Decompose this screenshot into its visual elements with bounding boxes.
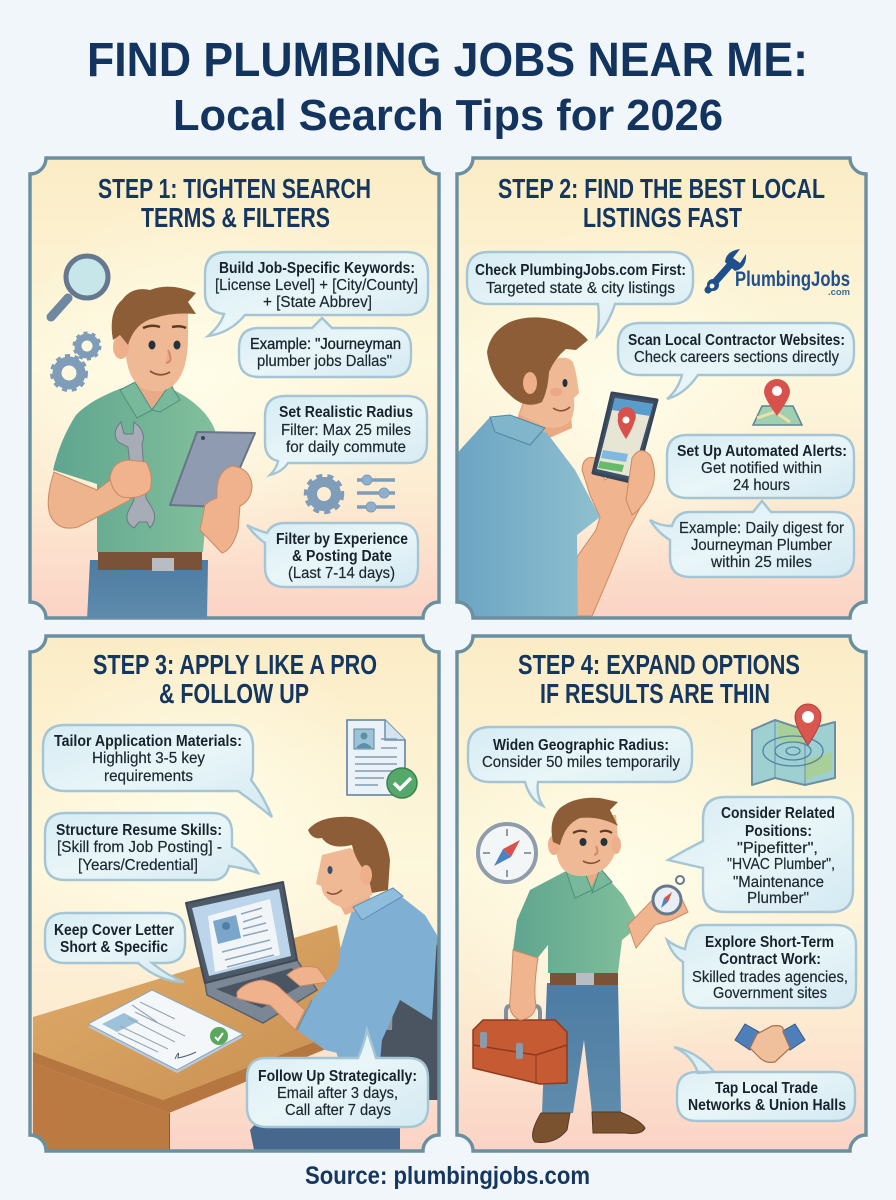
icon: map pin on map: [753, 379, 802, 425]
man with toolbox and compass: [513, 798, 688, 1142]
panel: step 2: [450, 158, 866, 620]
bubble: widen radius: Widen Geographic Radius:: [493, 737, 669, 754]
bubble: radius filter: [265, 396, 427, 475]
bubble: widen radius: Consider 50 miles temporarily: [482, 754, 680, 771]
heading step 1: TERMS & FILTERS: [141, 202, 330, 233]
icon: resume document with check: [347, 720, 417, 798]
icon: settings gear and sliders: [306, 475, 395, 512]
bubble: resume skills: Structure Resume Skills:: [56, 822, 222, 839]
bubble: tailor application: [43, 725, 272, 817]
bubble: cover letter: [45, 913, 185, 982]
icon: phone with map: [593, 393, 657, 483]
bubble: alert example: within 25 miles: [710, 554, 812, 571]
resume paper on desk: [88, 990, 243, 1073]
bubble: follow up: [247, 1030, 428, 1127]
bubble: related positions: "HVAC Plumber",: [727, 856, 835, 873]
bubble: alert example: [650, 501, 854, 577]
panel: step 4: [450, 636, 866, 1151]
panel frame step 2: [457, 158, 866, 618]
bubble: build keywords: [License Level] + [City/County]: [215, 277, 418, 294]
bubble: check PlumbingJobs: Check PlumbingJobs.com First:: [475, 262, 686, 279]
panel: step 3: [20, 636, 439, 1155]
bubble: build keywords: [205, 252, 428, 336]
bubble: automated alerts: Set Up Automated Alerts:: [677, 443, 847, 460]
heading step 2: [498, 173, 825, 233]
icon: magnifying glass: [51, 256, 108, 317]
bubble: check PlumbingJobs: [467, 252, 693, 336]
heading step 4: STEP 4: EXPAND OPTIONS: [518, 649, 800, 680]
logo: PlumbingJobs.com: PlumbingJobs: [735, 268, 850, 291]
bubble: build keywords: + [State Abbrev]: [263, 294, 372, 311]
bubble: resume skills: [Skill from Job Posting] -: [57, 839, 222, 856]
man at laptop: [250, 817, 439, 1155]
title: [87, 34, 808, 140]
bubble: trade networks: [674, 1047, 855, 1121]
bubble: related positions: "Pipefitter",: [737, 840, 818, 857]
bubble: contract work: Government sites: [713, 985, 827, 1002]
bubble: contract work: Explore Short-Term: [705, 934, 834, 951]
bubble: build keywords: Build Job-Specific Keywords:: [219, 260, 415, 277]
wooden desk: [33, 925, 353, 1155]
bubble: scan contractor websites: Scan Local Contractor Websites:: [628, 332, 845, 349]
bubble: related positions: "Maintenance: [733, 874, 824, 891]
bubble: contract work: Contract Work:: [719, 951, 821, 968]
bubble: experience filter: (Last 7-14 days): [288, 565, 395, 582]
bubble: related positions: Plumber": [747, 890, 809, 907]
heading step 1: [98, 173, 371, 233]
bubble: tailor application: requirements: [104, 768, 193, 785]
bubble: related positions: [668, 797, 853, 912]
bubble: automated alerts: [667, 435, 854, 498]
bubble: cover letter: Keep Cover Letter: [54, 922, 174, 939]
laptop: [186, 882, 317, 1023]
panel background step 1: [20, 158, 439, 618]
bubble: keyword example: Example: "Journeyman: [250, 336, 401, 353]
bubble: alert example: Example: Daily digest for: [679, 520, 845, 537]
bubble: related positions: Consider Related: [721, 805, 835, 822]
bubble: trade networks: Networks & Union Halls: [688, 1097, 846, 1114]
panel frame step 3: [30, 636, 439, 1151]
toolbox: [473, 1006, 567, 1084]
icon: compass: [478, 824, 536, 882]
bubble: resume skills: [45, 813, 258, 880]
typing hands and forearm: [236, 966, 338, 1053]
bubble: experience filter: [247, 523, 418, 587]
bubble: alert example: Journeyman Plumber: [691, 537, 833, 554]
bubble: automated alerts: 24 hours: [733, 477, 790, 494]
bubble: cover letter: Short & Specific: [60, 939, 168, 956]
heading step 2: LISTINGS FAST: [583, 202, 742, 233]
bubble: check PlumbingJobs: Targeted state & city listings: [486, 280, 675, 297]
bubble: scan contractor websites: [618, 323, 854, 399]
panel: step 1: [20, 158, 439, 620]
bubble: trade networks: Tap Local Trade: [715, 1080, 818, 1097]
bubble: widen radius: [468, 727, 692, 806]
heading step 4: IF RESULTS ARE THIN: [540, 678, 770, 709]
bubble: contract work: Skilled trades agencies,: [692, 969, 848, 986]
bubble: follow up: Call after 7 days: [285, 1102, 391, 1119]
title: Local Search Tips for 2026: [173, 91, 723, 140]
bubble: related positions: Positions:: [745, 823, 812, 840]
panel background step 3: [20, 636, 439, 1151]
icon: handshake: [735, 1024, 805, 1062]
bubble: keyword example: [239, 318, 411, 377]
bubble: tailor application: Tailor Application Materials:: [54, 733, 242, 750]
bubble: follow up: Email after 3 days,: [277, 1085, 398, 1102]
man with phone, back view: [457, 317, 657, 620]
bubble: scan contractor websites: Check careers sections directly: [634, 349, 839, 366]
bubble: contract work: [667, 925, 856, 1008]
source line: Source: plumbingjobs.com: [305, 1162, 590, 1190]
bubble: follow up: Follow Up Strategically:: [258, 1068, 417, 1085]
heading step 3: STEP 3: APPLY LIKE A PRO: [93, 649, 377, 680]
bubble: tailor application: Highlight 3-5 key: [92, 750, 205, 767]
bubble: automated alerts: Get notified within: [701, 460, 822, 477]
bubble: radius filter: Filter: Max 25 miles: [281, 422, 411, 439]
icon: gears: [52, 333, 100, 390]
logo: PlumbingJobs.com: [707, 249, 850, 297]
man with wrench and tablet: [48, 287, 255, 620]
panel background step 2: [450, 158, 866, 618]
heading step 1: STEP 1: TIGHTEN SEARCH: [98, 173, 371, 204]
heading step 3: & FOLLOW UP: [159, 678, 309, 709]
bubble: experience filter: & Posting Date: [292, 548, 392, 565]
heading step 3: [93, 649, 377, 709]
bubble: experience filter: Filter by Experience: [276, 531, 408, 548]
logo: PlumbingJobs.com: .com: [828, 287, 850, 297]
icon: folded map with pin: [752, 704, 835, 785]
bubble: radius filter: for daily commute: [286, 439, 406, 456]
bubble: keyword example: plumber jobs Dallas": [257, 353, 392, 370]
title: FIND PLUMBING JOBS NEAR ME:: [87, 34, 808, 87]
bubble: radius filter: Set Realistic Radius: [279, 404, 413, 421]
panel background step 4: [450, 636, 866, 1151]
bubble: resume skills: [Years/Credential]: [78, 857, 198, 874]
left arm holding toolbox: [510, 950, 538, 1020]
heading step 4: [518, 649, 800, 709]
